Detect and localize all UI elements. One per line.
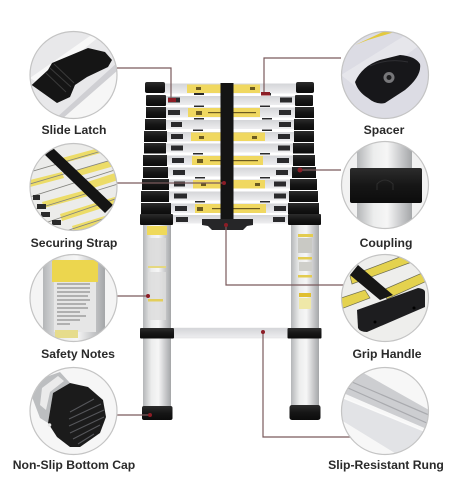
heading: grip handle: Grip Handle bbox=[352, 347, 422, 361]
icon: safety notes closeup bbox=[30, 254, 118, 342]
left upper tube bbox=[143, 225, 171, 328]
panel: non-slip bottom cap bbox=[13, 367, 135, 472]
heading: non-slip bottom cap: Non-Slip Bottom Cap bbox=[13, 458, 135, 472]
panel: grip handle bbox=[341, 254, 429, 361]
collars at lower rung bbox=[140, 328, 322, 338]
telescopic ladder bbox=[140, 82, 322, 420]
icon: rung closeup bbox=[342, 374, 428, 453]
yellow warning labels bbox=[187, 84, 266, 213]
upper rungs bbox=[160, 84, 300, 224]
securing strap bbox=[220, 83, 234, 220]
lower tubes bbox=[143, 338, 319, 406]
heading: coupling: Coupling bbox=[360, 236, 412, 250]
heading: safety notes: Safety Notes bbox=[41, 347, 115, 361]
icon: slide latch closeup bbox=[30, 31, 118, 119]
panel: coupling bbox=[341, 141, 429, 250]
panel: spacer bbox=[341, 31, 429, 137]
panel: safety notes bbox=[30, 254, 118, 361]
heading: slide latch: Slide Latch bbox=[41, 123, 107, 137]
grip handle bbox=[202, 219, 253, 230]
icon: strap closeup bbox=[30, 143, 118, 232]
lower rung bbox=[174, 328, 288, 338]
icon: coupling closeup bbox=[341, 141, 429, 229]
heading: slip-resistant rung: Slip-Resistant Rung bbox=[328, 458, 444, 472]
right telescopic collars bbox=[288, 82, 321, 225]
panel: slide latch bbox=[30, 31, 118, 137]
panel: slip-resistant rung bbox=[328, 367, 444, 472]
panel: securing strap bbox=[30, 143, 118, 250]
heading: spacer: Spacer bbox=[364, 123, 405, 137]
label text marks bbox=[196, 87, 260, 211]
right upper tube bbox=[291, 225, 319, 328]
rung slots and latches bbox=[168, 93, 292, 222]
icon: bottom cap closeup bbox=[30, 367, 118, 455]
heading: securing strap: Securing Strap bbox=[31, 236, 117, 250]
left telescopic collars bbox=[140, 82, 173, 225]
icon: spacer closeup bbox=[341, 31, 429, 119]
bottom caps bbox=[142, 405, 320, 420]
leader lines with red dots bbox=[117, 58, 351, 437]
icon: grip handle closeup bbox=[341, 254, 429, 342]
